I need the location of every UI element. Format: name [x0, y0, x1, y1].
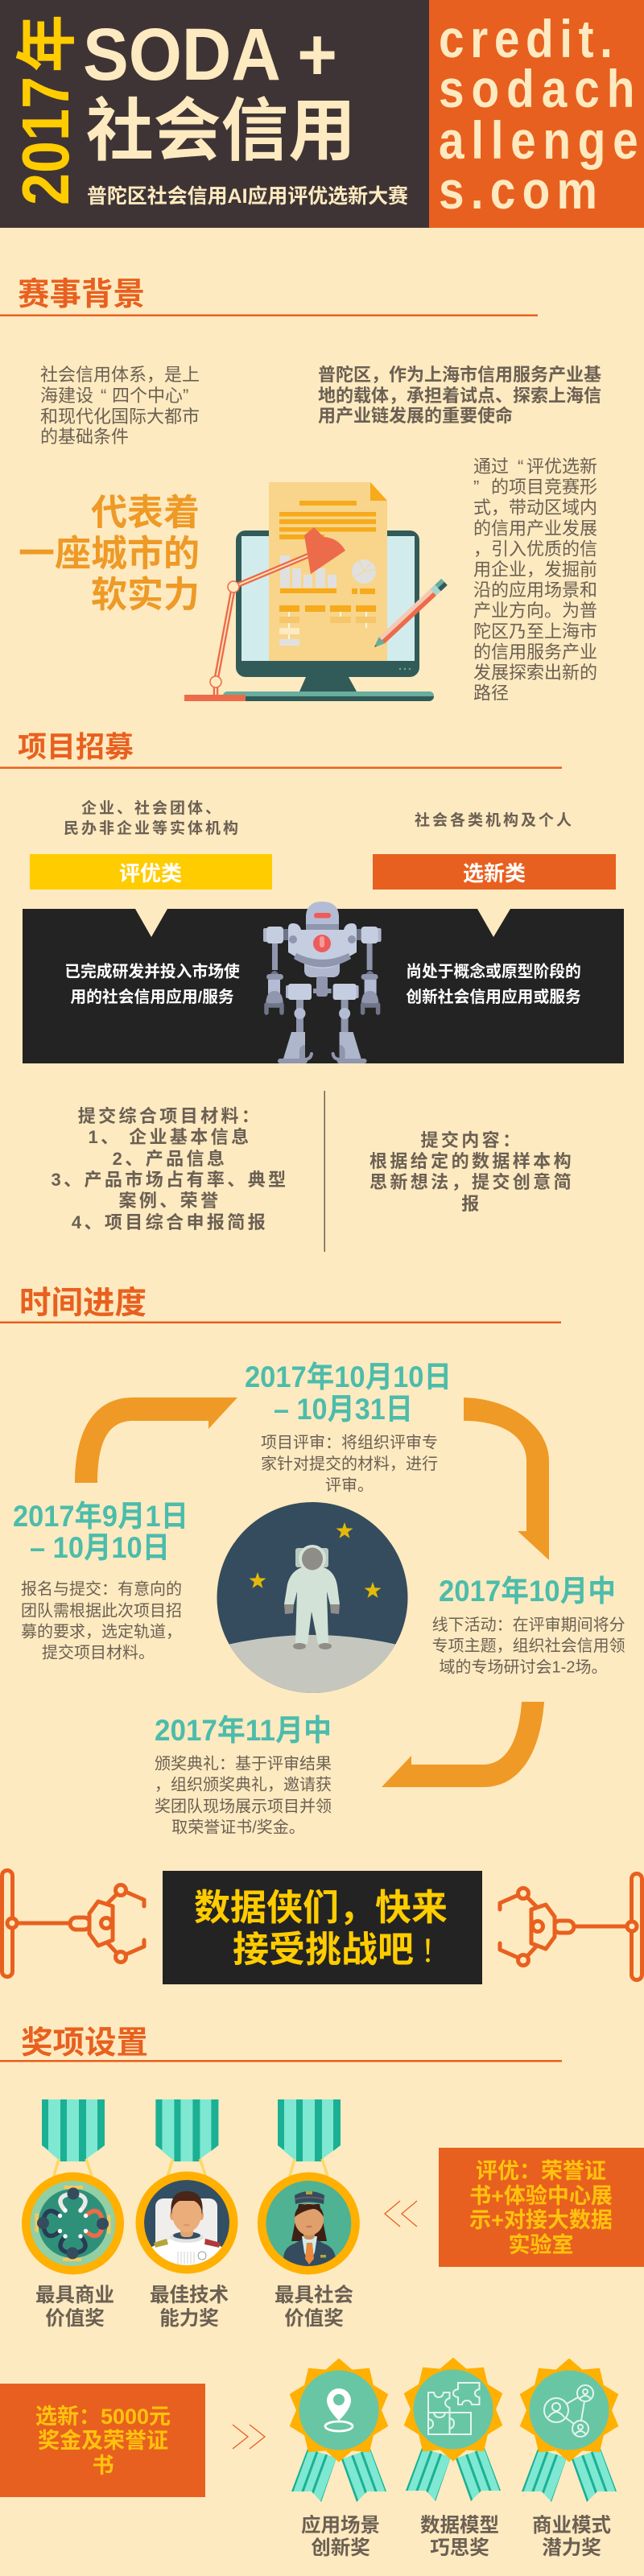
timeline step: offline events: 域的专场研讨会1-2场。 [440, 1658, 607, 1677]
icon: network of people [544, 2385, 593, 2437]
illustration: astronaut on the moon [217, 1502, 407, 1699]
right description: 尚处于概念或原型阶段的 [406, 963, 581, 980]
black panel with track descriptions [23, 909, 624, 1063]
text: competition format: 式，带动区域内 [473, 497, 597, 518]
rosette labels: 应用场景 [301, 2513, 380, 2537]
text: left submission materials: 4、项目综合申报简报 [72, 1212, 268, 1232]
text: competition format: “ [518, 456, 523, 477]
timeline step: award ceremony: 取荣誉证书/奖金。 [171, 1818, 305, 1837]
vertical year label [0, 14, 86, 205]
timeline step: registration: 2017年9月1日 [13, 1500, 188, 1533]
medal labels [35, 2284, 353, 2330]
timeline step: registration: – 10月10日 [30, 1531, 170, 1564]
timeline step: offline events [432, 1575, 625, 1677]
medal labels: 能力奖 [159, 2307, 219, 2330]
rosette labels: 数据模型 [420, 2514, 499, 2537]
tab: 评优类: 评优类 [119, 857, 182, 887]
rosette: business model [519, 2359, 620, 2505]
call to action banner: 接受挑战吧 [233, 1920, 414, 1972]
text: competition format: ，引入优质的信 [473, 539, 597, 559]
text: social credit system: 的基础条件 [40, 427, 129, 447]
left track audience: 企业、社会团体、 [81, 799, 223, 817]
text: left submission materials: 案例、荣誉 [118, 1191, 221, 1211]
website url [439, 10, 638, 221]
call to action banner: ！ [420, 1926, 451, 1971]
text: competition format: 陀区乃至上海市 [473, 621, 597, 642]
text: social credit system: “ [101, 386, 106, 406]
website url: sodach [439, 60, 634, 119]
left track audience [64, 799, 241, 837]
callout: 选新 rewards: 选新：5000元 [35, 2405, 171, 2429]
medal labels: 最具社会 [275, 2284, 353, 2306]
icon: robot [263, 902, 382, 1063]
monitor [223, 530, 434, 701]
medal labels: 最佳技术 [150, 2284, 229, 2306]
left description [64, 963, 240, 1006]
icon: location pin [325, 2388, 353, 2431]
right track audience: 社会各类机构及个人 [415, 808, 574, 830]
call to action banner: 数据侠们，快来 [194, 1878, 448, 1930]
pencil [371, 579, 448, 650]
text: social credit system: 海建设 [40, 386, 93, 406]
callout: 选新 rewards: 书 [92, 2454, 114, 2478]
slogan: 一座城市的 [19, 533, 200, 574]
text: competition format: 的信用产业发展 [473, 518, 597, 539]
text: competition format [473, 456, 597, 704]
timeline step: review [245, 1360, 452, 1495]
timeline step: award ceremony: 颁奖典礼：基于评审结果 [155, 1755, 332, 1773]
timeline step: review: 2017年10月10日 [245, 1360, 452, 1393]
text: left submission materials [51, 1106, 289, 1232]
tab: 评优类 [30, 854, 272, 890]
callout: 选新 rewards: 奖金及荣誉证 [38, 2429, 168, 2453]
left description: 已完成研发并投入市场使 [64, 963, 240, 980]
icon: right robot claw [500, 1874, 642, 1980]
tab: 选新类: 选新类 [463, 857, 526, 887]
text: social credit system [40, 365, 200, 447]
document [269, 482, 387, 661]
text: Putuo district mission [318, 365, 601, 426]
callout: 选新 rewards [0, 2384, 205, 2497]
website url: s.com [439, 161, 597, 221]
text: Putuo district mission: 地的载体，承担着试点、探索上海信 [318, 386, 601, 406]
text: right submission content: 思新想法，提交创意简 [369, 1172, 574, 1192]
callout: 评优 rewards: 书+体验中心展 [469, 2184, 613, 2208]
timeline step: offline events: 专项主题，组织社会信用领 [432, 1637, 625, 1655]
timeline step: offline events: 2017年10月中 [439, 1575, 616, 1608]
text: right submission content: 报 [461, 1194, 482, 1214]
vertical year label: 年 [0, 14, 86, 72]
icon: left robot claw [2, 1871, 144, 1977]
text: social credit system: 和现代化国际大都市 [40, 407, 200, 427]
timeline step: review: 家针对提交的材料，进行 [261, 1455, 438, 1473]
text: Putuo district mission: 用产业链发展的重要使命 [318, 406, 513, 426]
arrow: step 1 to step 2 [75, 1397, 237, 1483]
callout: 评优 rewards [439, 2148, 644, 2267]
vertical year label: 2017 [8, 76, 83, 205]
text: competition format: 的信用服务产业 [473, 642, 597, 662]
text: left submission materials: 2、产品信息 [113, 1149, 227, 1169]
text: competition format: ” [473, 477, 479, 497]
timeline step: award ceremony: 奖团队现场展示项目并领 [155, 1798, 332, 1816]
text: right submission content: 根据给定的数据样本构 [369, 1151, 574, 1171]
desk lamp [184, 527, 345, 701]
timeline step: registration: 报名与提交：有意向的 [21, 1580, 182, 1599]
illustration: monitor, document, lamp and pencil [184, 482, 448, 701]
main title: 社会信用 [86, 76, 356, 175]
subtitle: 普陀区社会信用AI应用评优选新大赛 [87, 184, 408, 208]
timeline step: registration: 团队需根据此次项目招 [21, 1602, 182, 1620]
text: competition format: 通过 [473, 456, 509, 477]
main title: SODA + [83, 14, 337, 96]
medal labels: 价值奖 [284, 2307, 344, 2330]
rosette labels [301, 2513, 611, 2559]
callout: 评优 rewards: 实验室 [509, 2233, 573, 2257]
timeline step: review: – 10月31日 [274, 1393, 413, 1426]
medal: social value [258, 2099, 360, 2275]
call to action banner [163, 1871, 482, 1984]
heading: 时间进度: 时间进度 [19, 1278, 147, 1323]
icon: double chevrons left [385, 2201, 417, 2227]
right description [406, 963, 581, 1006]
text: left submission materials: 1、 企业基本信息 [89, 1127, 251, 1147]
text: right submission content [369, 1130, 574, 1214]
header banner [0, 0, 644, 228]
text: social credit system: 社会信用体系，是上 [40, 365, 200, 385]
slogan: 代表着 [91, 492, 200, 533]
heading: 奖项设置: 奖项设置 [21, 2017, 148, 2063]
rosette: data model [403, 2357, 504, 2504]
slogan: 软实力 [91, 574, 200, 615]
timeline step: award ceremony [155, 1714, 332, 1837]
medal labels: 价值奖 [45, 2307, 105, 2330]
arrow: step 3 to step 4 [382, 1702, 544, 1787]
text: right submission content: 提交内容： [420, 1130, 523, 1150]
callout: 评优 rewards: 示+对接大数据 [469, 2208, 613, 2232]
main title [83, 14, 356, 175]
website url: allenge [439, 111, 638, 171]
text: Putuo district mission: 普陀区，作为上海市信用服务产业基 [318, 365, 601, 385]
heading: 项目招募: 项目招募 [18, 724, 134, 766]
timeline step: review: 评审。 [325, 1476, 374, 1495]
text: left submission materials: 提交综合项目材料： [78, 1106, 262, 1126]
timeline step: review: 项目评审：将组织评审专 [261, 1434, 438, 1452]
tab: 选新类 [373, 854, 616, 890]
text: competition format: 沿的应用场景和 [473, 580, 597, 601]
text: left submission materials: 3、产品市场占有率、典型 [51, 1170, 289, 1190]
text: social credit system: ” [183, 386, 188, 406]
right description: 创新社会信用应用或服务 [406, 988, 581, 1006]
text: competition format: 用企业，发掘前 [473, 559, 597, 580]
medal: technical ability [135, 2099, 238, 2273]
rosette: application scenario [289, 2359, 390, 2505]
rosette labels: 创新奖 [311, 2537, 370, 2559]
text: competition format: 的项目竞赛形 [491, 477, 597, 497]
timeline step: registration: 提交项目材料。 [42, 1644, 155, 1662]
timeline step: offline events: 线下活动：在评审期间将分 [432, 1616, 625, 1634]
timeline step: award ceremony: ，组织颁奖典礼，邀请获 [155, 1776, 332, 1794]
text: competition format: 产业方向。为普 [473, 601, 597, 621]
icon: double chevrons right [233, 2425, 265, 2449]
website url: credit. [439, 10, 613, 69]
rosette labels: 巧思奖 [430, 2537, 489, 2559]
rosette labels: 潜力奖 [542, 2537, 601, 2559]
icon: puzzle [428, 2383, 480, 2434]
callout: 评优 rewards: 评优：荣誉证 [476, 2159, 606, 2183]
medal labels: 最具商业 [35, 2284, 114, 2306]
timeline step: award ceremony: 2017年11月中 [155, 1714, 332, 1747]
arrow: step 2 to step 3 [464, 1397, 549, 1560]
left description: 用的社会信用应用/服务 [70, 988, 234, 1006]
left track audience: 民办非企业等实体机构 [64, 819, 241, 837]
text: competition format: 评优选新 [526, 456, 597, 477]
slogan [19, 492, 200, 615]
rosette labels: 商业模式 [532, 2514, 611, 2537]
text: competition format: 路径 [473, 683, 509, 704]
text: competition format: 发展探索出新的 [473, 663, 597, 683]
timeline step: registration [13, 1500, 188, 1662]
timeline step: registration: 募的要求，选定轨道， [21, 1623, 182, 1641]
heading: 赛事背景: 赛事背景 [18, 269, 145, 315]
medal: business value [22, 2099, 124, 2275]
text: social credit system: 四个中心 [112, 386, 183, 406]
